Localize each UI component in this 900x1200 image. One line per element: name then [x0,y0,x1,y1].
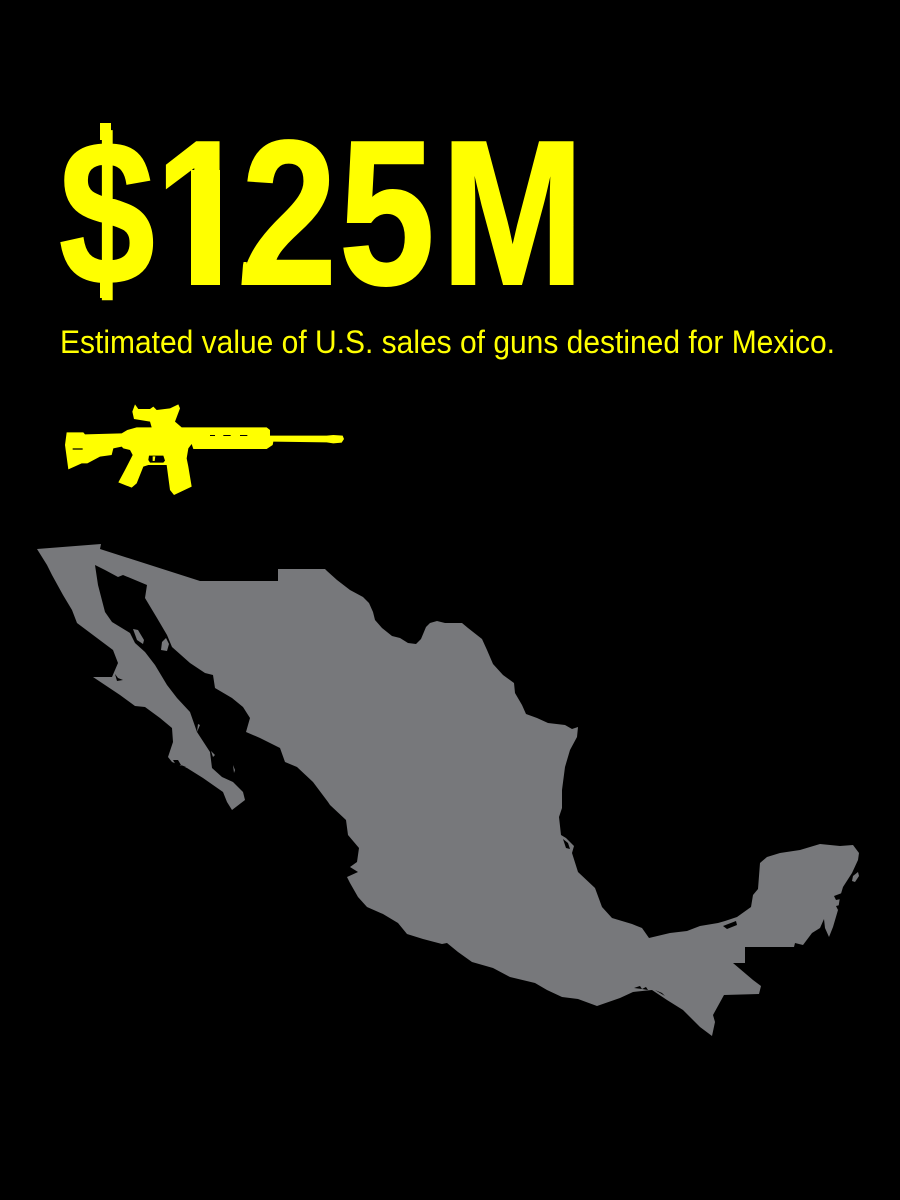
island: Tiburon [161,638,169,651]
island: Cozumel [852,872,859,882]
icon: rifle [65,404,344,495]
island: Angel de la Guarda [133,629,144,644]
subtitle text: Estimated value of U.S. sales of guns destined for Mexico. [60,324,835,360]
title: $125M: $125M [59,98,584,329]
map: Mexico [37,544,859,1036]
islands: Gulf of California small [197,724,235,773]
lagoons [115,674,842,996]
